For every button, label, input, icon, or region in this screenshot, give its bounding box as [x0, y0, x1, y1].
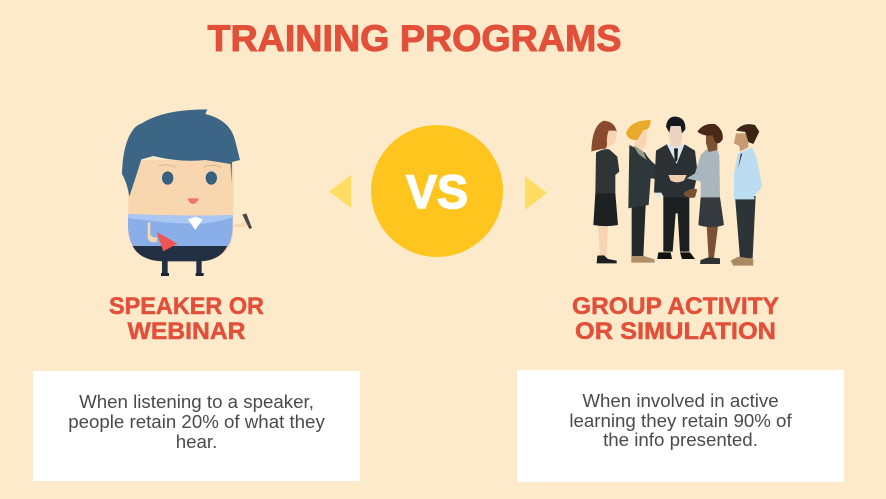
- text card: speaker retention: people retain 20% of what they: [68, 411, 325, 432]
- person 5: [731, 124, 762, 266]
- heading: speaker or webinar: WEBINAR: [128, 318, 246, 345]
- icon: group of business people: [591, 117, 762, 266]
- icon: speaker character: [122, 109, 252, 276]
- text card: speaker retention: [33, 371, 360, 481]
- heading: group activity or simulation: OR SIMULATION: [575, 318, 776, 345]
- title: TRAINING PROGRAMS: [208, 18, 622, 59]
- text card: active learning retention: When involved in active: [582, 390, 779, 411]
- person 3: [654, 117, 698, 259]
- text card: active learning retention: the info presented.: [603, 429, 758, 450]
- text card: active learning retention: [517, 370, 844, 482]
- person 1: [591, 121, 619, 263]
- heading: group activity or simulation: GROUP ACTIVITY: [572, 293, 779, 320]
- text card: speaker retention: hear.: [176, 431, 217, 452]
- person 2: [626, 120, 670, 263]
- person 4: [683, 124, 724, 264]
- text card: active learning retention: learning they retain 90% of: [569, 410, 792, 431]
- heading: speaker or webinar: SPEAKER OR: [109, 293, 264, 320]
- text card: speaker retention: When listening to a speaker,: [79, 391, 314, 412]
- left arrow: [329, 175, 351, 208]
- right arrow: [525, 176, 547, 210]
- vs badge: [371, 125, 503, 257]
- vs badge: VS: [406, 165, 468, 218]
